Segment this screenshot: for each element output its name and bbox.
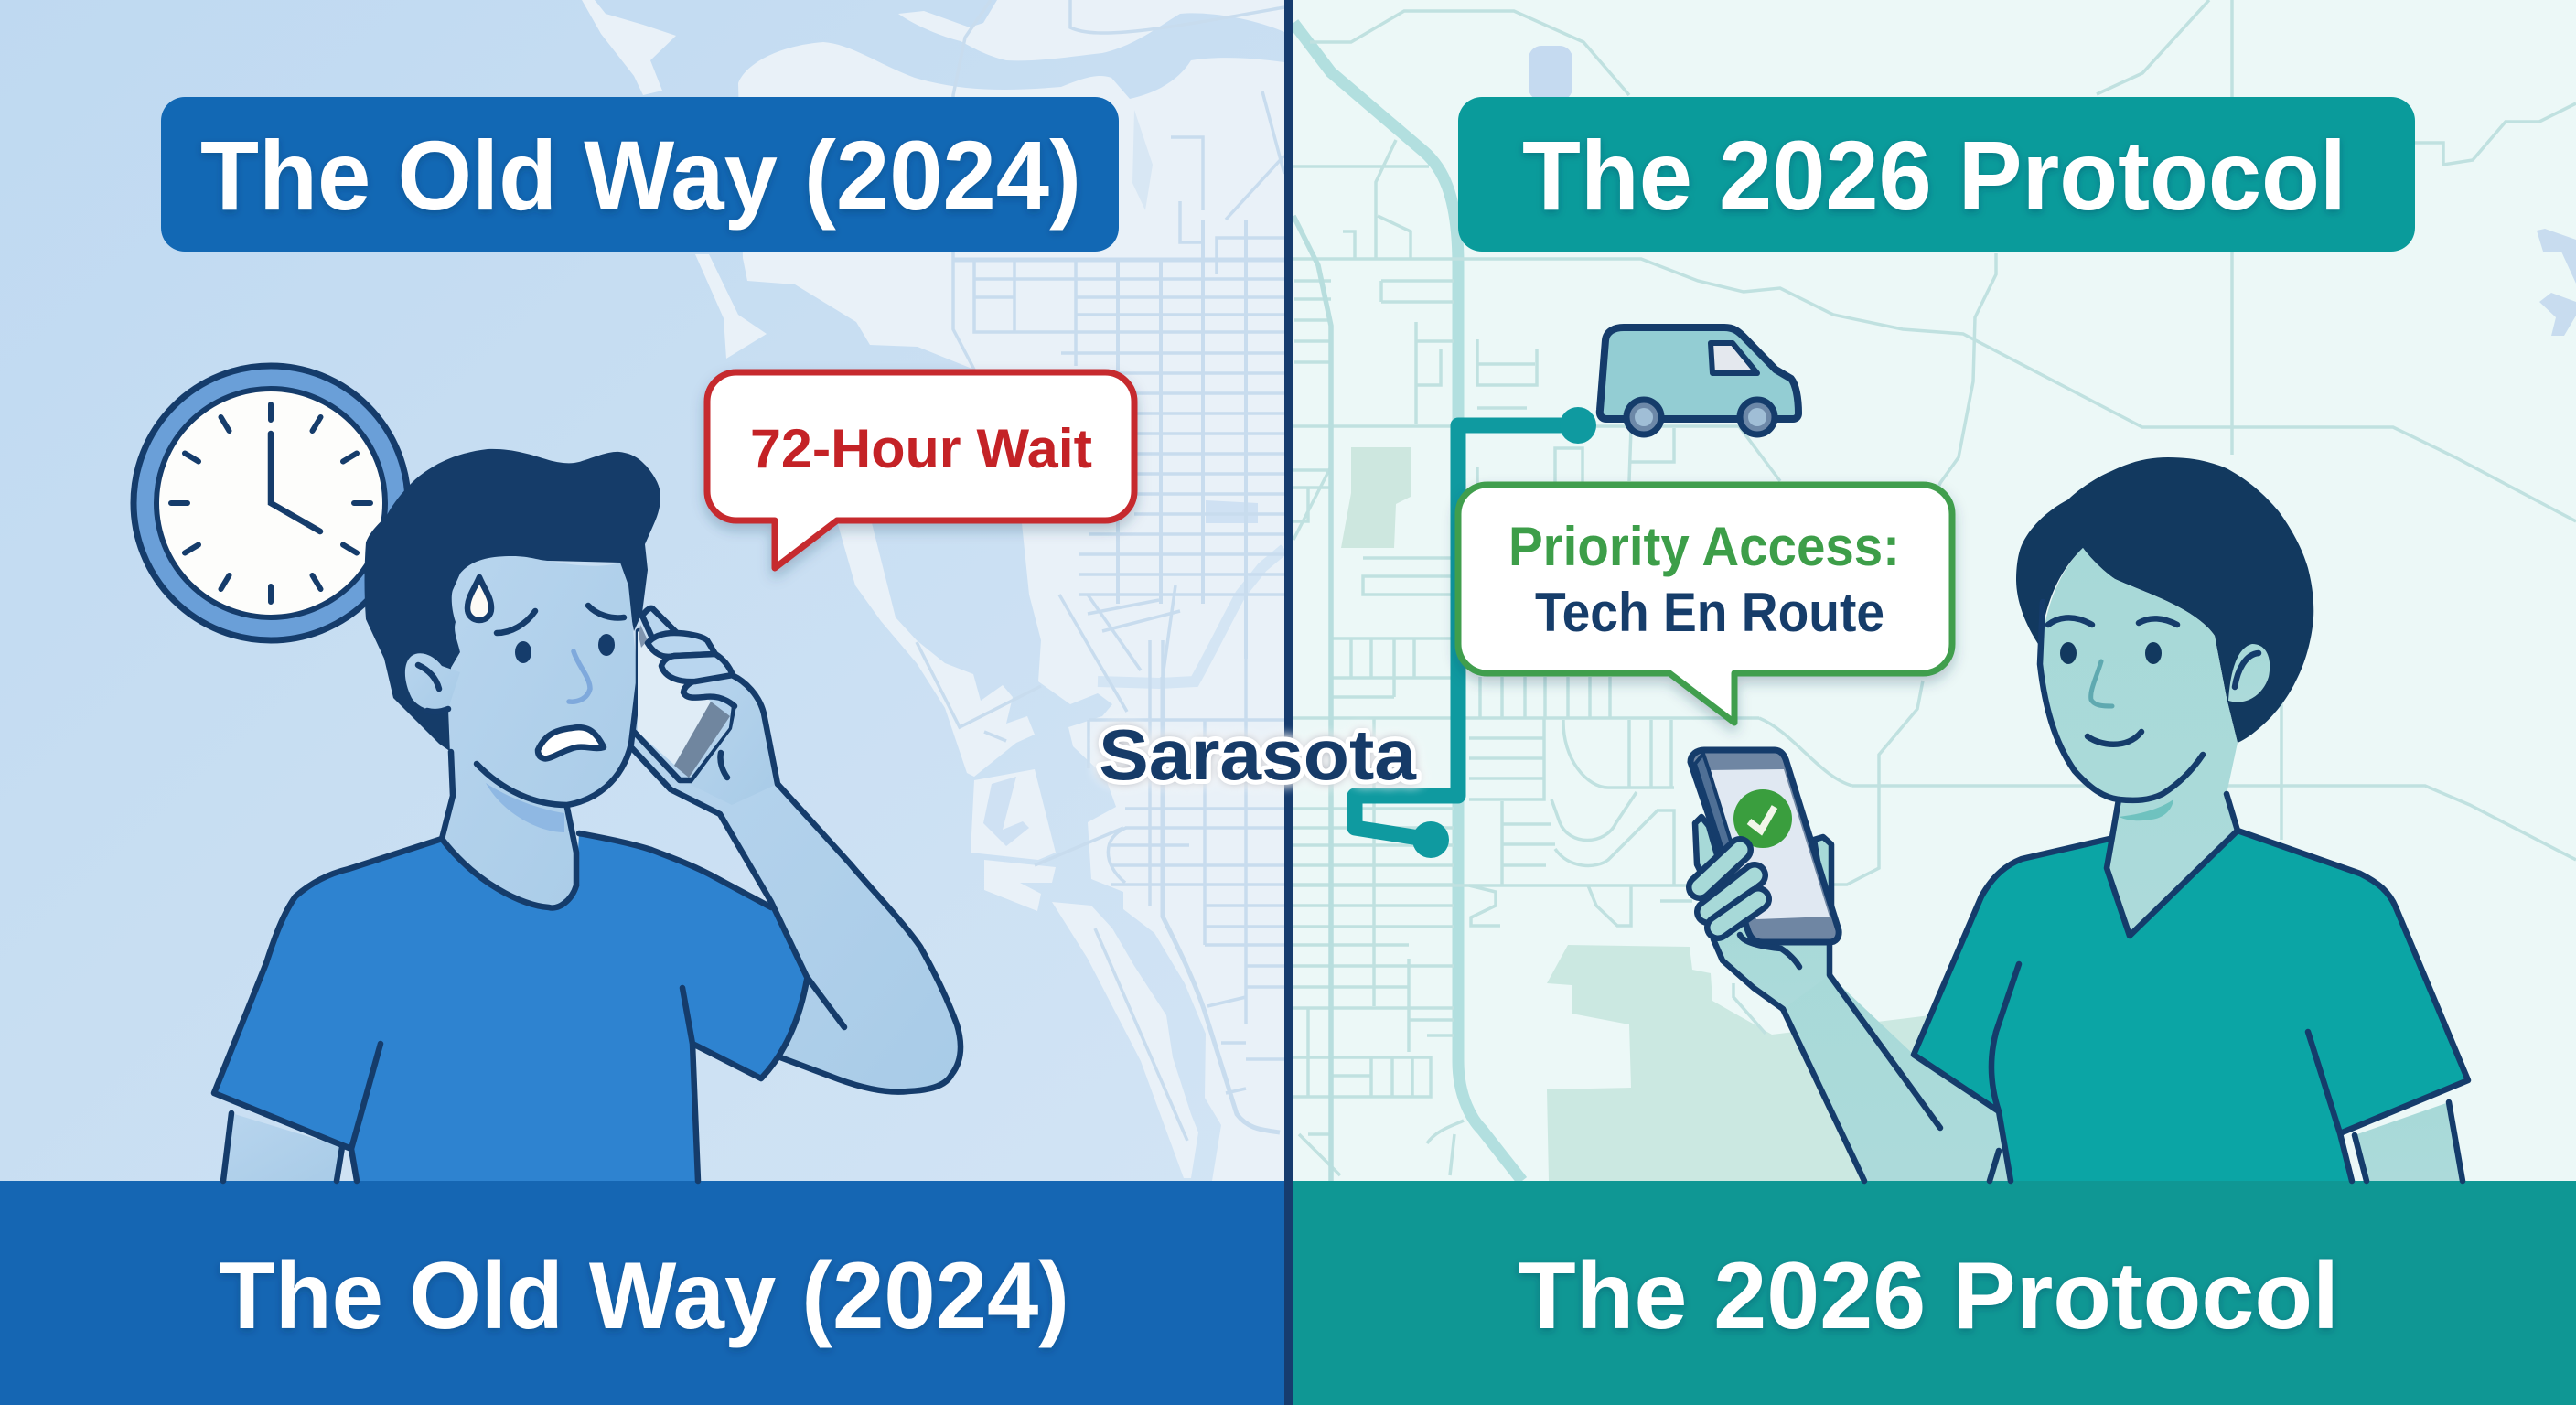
callout text: 72-Hour Wait (750, 418, 1092, 479)
header: old way (161, 97, 1119, 252)
route line to technician (1355, 407, 1596, 858)
header title: old way: The Old Way (2024) (200, 120, 1081, 231)
bottom band: 2026 protocol (1293, 1181, 2576, 1405)
person: shirt outline (1914, 831, 2468, 1181)
man: face outline (477, 631, 639, 805)
person: brows (2048, 617, 2177, 625)
person: nose (2091, 661, 2112, 706)
icon: smartphone (1690, 750, 1839, 942)
map: bays and canal (983, 110, 1284, 846)
person: hair (2016, 457, 2313, 743)
man: head and neck (442, 556, 639, 908)
illustration: worried man on phone (214, 449, 961, 1181)
person: hand and fingers (1700, 850, 1830, 1009)
phone edge (1695, 754, 1732, 855)
man: sweat drop (467, 577, 491, 620)
man: fingers (642, 608, 778, 805)
route end dot: van (1560, 407, 1596, 444)
map: parks and water (1341, 46, 2576, 1181)
illustration: calm person with phone (1690, 457, 2468, 1181)
panel: 2026 protocol map background (1286, 0, 2576, 1181)
check badge (1733, 789, 1792, 848)
man: raised arm (631, 681, 961, 1092)
man: under-sleeve forearm (223, 1113, 343, 1181)
map: secondary road (1293, 216, 1331, 1181)
person: palm (1713, 915, 1830, 1009)
person: face outline (2040, 602, 2203, 800)
person: eyes (2060, 642, 2162, 664)
van window (1711, 343, 1757, 373)
man: shirt (214, 833, 807, 1181)
man: hair (364, 449, 660, 752)
map: road network (1293, 0, 2576, 1175)
person: neck shadow (2119, 799, 2174, 820)
divider line (1284, 0, 1293, 1181)
man: brows (497, 606, 624, 633)
person: shirt (1914, 831, 2468, 1181)
route start dot (1412, 821, 1449, 858)
map: main highway (1293, 23, 1522, 1181)
man: shirt outline (214, 833, 807, 1181)
bottom divider (1284, 1181, 1293, 1405)
label: Sarasota: Sarasota (1099, 714, 1417, 795)
person: smile (2088, 732, 2141, 745)
header: 2026 protocol (1458, 97, 2415, 252)
bottom label: old way: The Old Way (2024) (219, 1243, 1069, 1349)
man: neck shadow (486, 783, 564, 832)
map: road grid (917, 0, 1284, 1141)
bottom band: old way (0, 1181, 1284, 1405)
person: ear (2228, 644, 2270, 702)
man: nose (569, 651, 590, 702)
icon: phone at ear (634, 625, 735, 780)
person: under-sleeve forearm (2355, 1102, 2463, 1181)
icon: wall clock (134, 366, 408, 640)
callout text: tech en route: Tech En Route (1535, 582, 1884, 643)
panel: old way map background (0, 0, 1286, 1181)
header title: 2026 protocol: The 2026 Protocol (1522, 120, 2346, 231)
phone screen (1709, 769, 1830, 919)
person: arm (1719, 915, 2011, 1181)
callout: priority access (1458, 485, 1952, 723)
man: eyes (515, 634, 615, 663)
callout: 72-hour wait (707, 372, 1134, 568)
man: ear (405, 653, 460, 712)
bottom label: 2026 protocol: The 2026 Protocol (1518, 1243, 2339, 1349)
icon: service van (1600, 327, 1798, 434)
callout text: priority access: Priority Access: (1508, 516, 1900, 577)
person: head and neck (2040, 548, 2238, 936)
man: mouth (538, 727, 604, 758)
van wheels (1626, 400, 1775, 434)
person: far-side fingers (1695, 817, 1831, 906)
map: land masses (582, 0, 1284, 1181)
